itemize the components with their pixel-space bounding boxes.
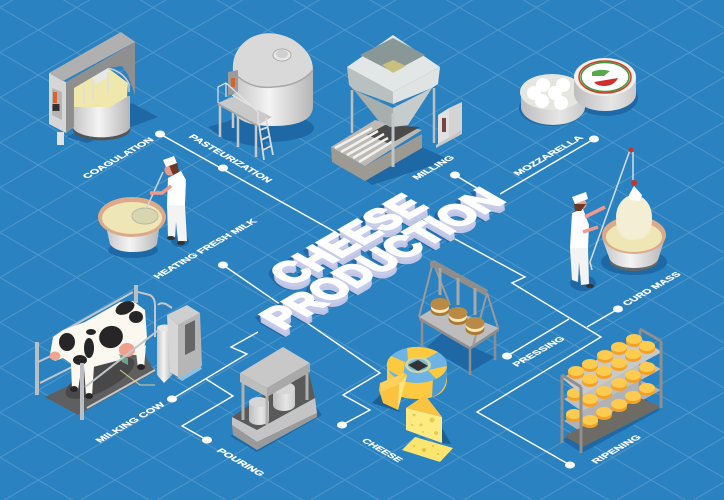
illustration: ripening rack — [562, 329, 662, 453]
illustration: cheese wheel and wedges — [372, 347, 453, 462]
label: curd mass: CURD MASS — [620, 270, 683, 307]
illustration: worker heating milk — [98, 156, 189, 258]
label: pasteurization: PASTEURIZATION — [186, 133, 275, 184]
title: cheese production: PRODUCTION — [250, 182, 515, 335]
illustration: worker with curd mass — [570, 148, 667, 291]
illustration: pressing stand — [419, 260, 499, 375]
label: cheese: CHEESE — [359, 437, 405, 464]
illustration: milking cow — [37, 285, 202, 420]
label: heating fresh milk: HEATING FRESH MILK — [151, 217, 260, 280]
label: milling: MILLING — [410, 154, 457, 181]
illustration: pasteurization tank — [208, 33, 314, 160]
label: milking cow: MILKING COW — [93, 401, 168, 444]
illustration: coagulation machine — [49, 32, 158, 145]
illustration: mozzarella box — [519, 58, 638, 126]
label: pouring: POURING — [214, 447, 267, 478]
illustration: milling hopper and conveyor — [331, 35, 462, 185]
label: pressing: PRESSING — [510, 335, 567, 368]
connector dots — [155, 130, 623, 468]
illustration: pouring machine — [230, 347, 322, 452]
label: coagulation: COAGULATION — [80, 136, 156, 180]
flow lines — [160, 134, 618, 465]
label: mozzarella: MOZZARELLA — [511, 134, 586, 177]
label: ripening: RIPENING — [589, 433, 644, 465]
title: cheese production: CHEESE — [259, 188, 437, 291]
